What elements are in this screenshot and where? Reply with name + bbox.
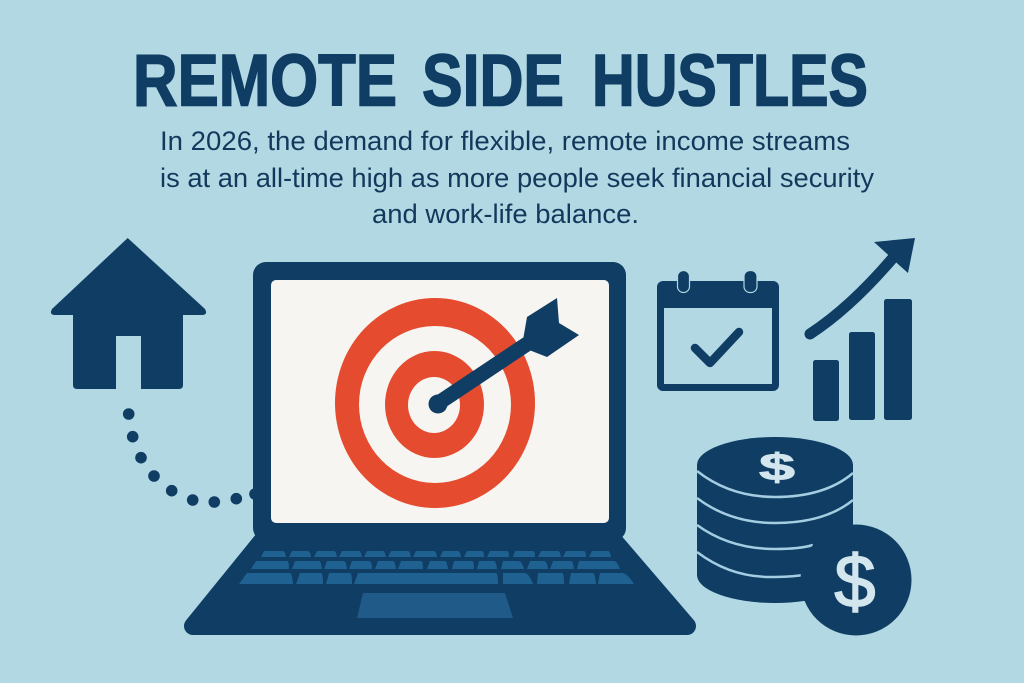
calendar body xyxy=(657,281,779,391)
bars xyxy=(813,299,912,421)
calendar rings xyxy=(678,270,690,292)
intro text block: is at an all-time high as more people seek financial security xyxy=(160,163,874,193)
laptop base xyxy=(193,541,687,626)
title xyxy=(133,40,868,122)
dotted path from house to laptop xyxy=(123,408,261,508)
intro text block xyxy=(160,126,874,229)
growth arrow xyxy=(810,238,915,334)
icon: growth bar chart xyxy=(810,238,915,421)
coin edges xyxy=(697,471,853,577)
icon: calendar with check xyxy=(657,270,779,391)
laptop screen frame xyxy=(253,262,626,541)
check mark xyxy=(695,332,739,363)
title: REMOTE xyxy=(133,40,397,122)
touchpad xyxy=(357,593,513,618)
icon: laptop xyxy=(193,262,687,626)
intro text block: In 2026, the demand for flexible, remote income streams xyxy=(160,126,850,156)
stack body xyxy=(697,437,853,603)
dollar sign on coin: $ xyxy=(834,540,876,623)
icon: coin stack xyxy=(697,437,853,603)
dart arrow xyxy=(428,298,579,414)
icon: dollar coin xyxy=(800,524,912,636)
title: SIDE xyxy=(422,40,564,122)
intro text block: and work-life balance. xyxy=(372,199,639,229)
title: HUSTLES xyxy=(592,40,868,122)
icon: target xyxy=(335,298,579,508)
icon: house xyxy=(51,238,206,389)
laptop screen xyxy=(271,280,609,523)
keyboard xyxy=(239,551,634,584)
target rings xyxy=(335,298,535,508)
dollar sign on stack: $ xyxy=(759,447,795,489)
